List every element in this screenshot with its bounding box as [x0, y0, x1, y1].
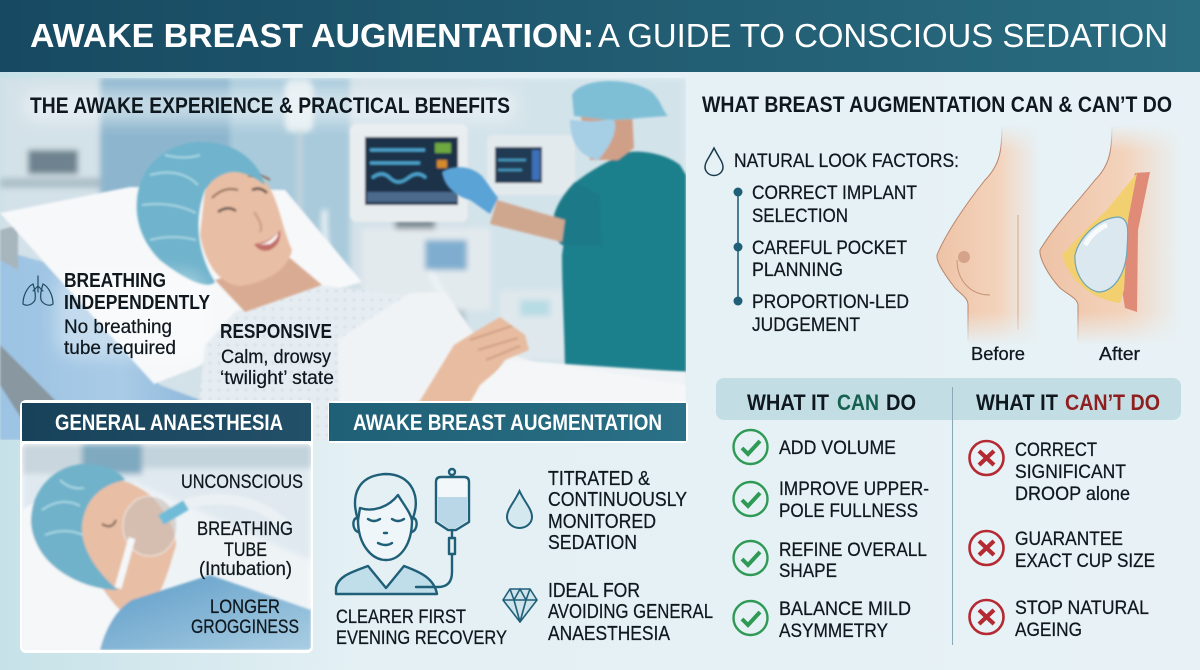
panel: can and cannot comparison header: CAN: [837, 390, 879, 415]
callout: responsive: Calm, drowsy: [221, 346, 331, 368]
factor list: JUDGEMENT: [752, 314, 860, 336]
icon: sedation drop: [507, 491, 532, 528]
monitor secondary: [487, 135, 575, 195]
can do text: [779, 437, 929, 642]
can do text: ASYMMETRY: [779, 620, 888, 642]
cannot do text: EXACT CUP SIZE: [1015, 550, 1155, 572]
labels: general anaesthesia effects: TUBE: [224, 540, 267, 561]
heading: awake breast augmentation: AWAKE BREAST AUGMENTATION: [353, 410, 662, 435]
can do text: SHAPE: [779, 560, 837, 582]
before torso: [937, 125, 1040, 345]
callout: breathing independently: BREATHING: [64, 270, 166, 292]
labels: general anaesthesia effects: GROGGINESS: [191, 617, 299, 638]
callout: breathing independently: No breathing: [64, 316, 172, 338]
icon: diamond: [503, 589, 537, 622]
cannot do text: STOP NATURAL: [1015, 597, 1149, 619]
panel: natural look factors: NATURAL LOOK FACTORS:: [734, 150, 959, 172]
title banner: [0, 0, 1200, 72]
text: titrated sedation: SEDATION: [548, 532, 637, 554]
labels: general anaesthesia effects: (Intubation): [199, 559, 292, 580]
illustration: before and after anatomy: After: [1099, 344, 1140, 364]
text: ideal for avoiding general anaesthesia: [548, 580, 713, 645]
icon: sedated patient with IV: [336, 469, 469, 594]
callout: responsive: RESPONSIVE: [220, 321, 332, 343]
monitor main: [350, 124, 468, 222]
cannot do text: [1015, 439, 1155, 641]
doctor: [442, 81, 686, 372]
blanket front: [470, 366, 501, 401]
title banner: A GUIDE TO CONSCIOUS SEDATION: [598, 17, 1168, 54]
text: clearer first evening recovery: CLEARER FIRST: [336, 607, 466, 628]
text: clearer first evening recovery: EVENING RECOVERY: [336, 628, 507, 649]
check icons: [734, 430, 768, 635]
illustration: before and after anatomy: Before: [971, 344, 1025, 364]
text: ideal for avoiding general anaesthesia: IDEAL FOR: [548, 580, 640, 602]
factor list: CAREFUL POCKET: [752, 237, 907, 259]
patient pillow: [0, 187, 362, 384]
heading: awake experience: THE AWAKE EXPERIENCE & PRACTICAL BENEFITS: [30, 93, 510, 118]
panel: can and cannot comparison header: [716, 378, 1181, 420]
cannot do text: GUARANTEE: [1015, 528, 1123, 550]
patient neck and face: [200, 171, 322, 312]
can do text: BALANCE MILD: [779, 598, 911, 620]
callout: breathing independently: tube required: [64, 337, 176, 359]
panel: the awake experience photo: [0, 78, 686, 440]
factor list: [752, 182, 917, 336]
panel: can and cannot comparison header: WHAT IT: [747, 390, 830, 415]
can do text: IMPROVE UPPER-: [779, 478, 929, 500]
surgical cap: [137, 142, 265, 285]
icon: lungs: [23, 276, 53, 305]
labels: general anaesthesia effects: BREATHING: [197, 519, 293, 540]
text: titrated sedation: MONITORED: [548, 511, 656, 533]
callout: breathing independently: INDEPENDENTLY: [64, 292, 211, 314]
heading: general anaesthesia: GENERAL ANAESTHESIA: [55, 410, 283, 435]
patient gown: [198, 286, 390, 440]
factor list: PLANNING: [752, 259, 843, 281]
cannot do text: SIGNIFICANT: [1015, 461, 1126, 483]
timeline markers: [734, 188, 742, 306]
callout: responsive: ‘twilight’ state: [220, 367, 334, 389]
labels: general anaesthesia effects: LONGER: [210, 597, 280, 618]
patient hands: [418, 316, 530, 401]
panel: general anaesthesia: [20, 400, 313, 653]
factor list: CORRECT IMPLANT: [752, 182, 917, 204]
cannot do text: AGEING: [1015, 619, 1082, 641]
labels: general anaesthesia effects: [181, 472, 303, 638]
icon: drop outline: [705, 148, 723, 176]
after torso: [1040, 125, 1182, 345]
text: titrated sedation: TITRATED &: [548, 468, 651, 490]
heading: awake breast augmentation: [329, 403, 686, 441]
panel: can and cannot comparison header: DO: [886, 390, 916, 415]
text: clearer first evening recovery: [336, 607, 507, 649]
panel: can and cannot comparison header: WHAT IT: [976, 390, 1059, 415]
list: what it cannot do: [970, 439, 1155, 641]
text: ideal for avoiding general anaesthesia: AVOIDING GENERAL: [548, 601, 713, 623]
can do text: REFINE OVERALL: [779, 539, 927, 561]
cannot do text: DROOP alone: [1015, 483, 1130, 505]
panel: awake breast augmentation: [328, 401, 713, 649]
blanket: [339, 293, 686, 401]
text: ideal for avoiding general anaesthesia: ANAESTHESIA: [548, 623, 671, 645]
panel: natural look factors: [705, 148, 959, 336]
list: what it can do: [734, 430, 929, 642]
labels: general anaesthesia effects: UNCONSCIOUS: [181, 472, 303, 493]
callout: responsive: [220, 321, 334, 389]
factor list: SELECTION: [752, 205, 848, 227]
can do text: ADD VOLUME: [779, 437, 896, 459]
illustration: before and after anatomy: [937, 125, 1182, 364]
callout: breathing independently: [23, 270, 211, 359]
photo: intubated patient: [22, 444, 312, 650]
factor list: PROPORTION-LED: [752, 291, 909, 313]
title banner: AWAKE BREAST AUGMENTATION:: [30, 17, 594, 54]
patient bed: [0, 225, 200, 440]
text: titrated sedation: CONTINUOUSLY: [548, 489, 687, 511]
cannot do text: CORRECT: [1015, 439, 1097, 461]
clinic room background: [0, 78, 686, 398]
text: titrated sedation: [548, 468, 687, 554]
can do text: POLE FULLNESS: [779, 500, 918, 522]
heading: general anaesthesia: [22, 403, 311, 441]
cross icons: [970, 441, 1004, 634]
panel: can and cannot comparison header: CAN’T DO: [1065, 390, 1160, 415]
